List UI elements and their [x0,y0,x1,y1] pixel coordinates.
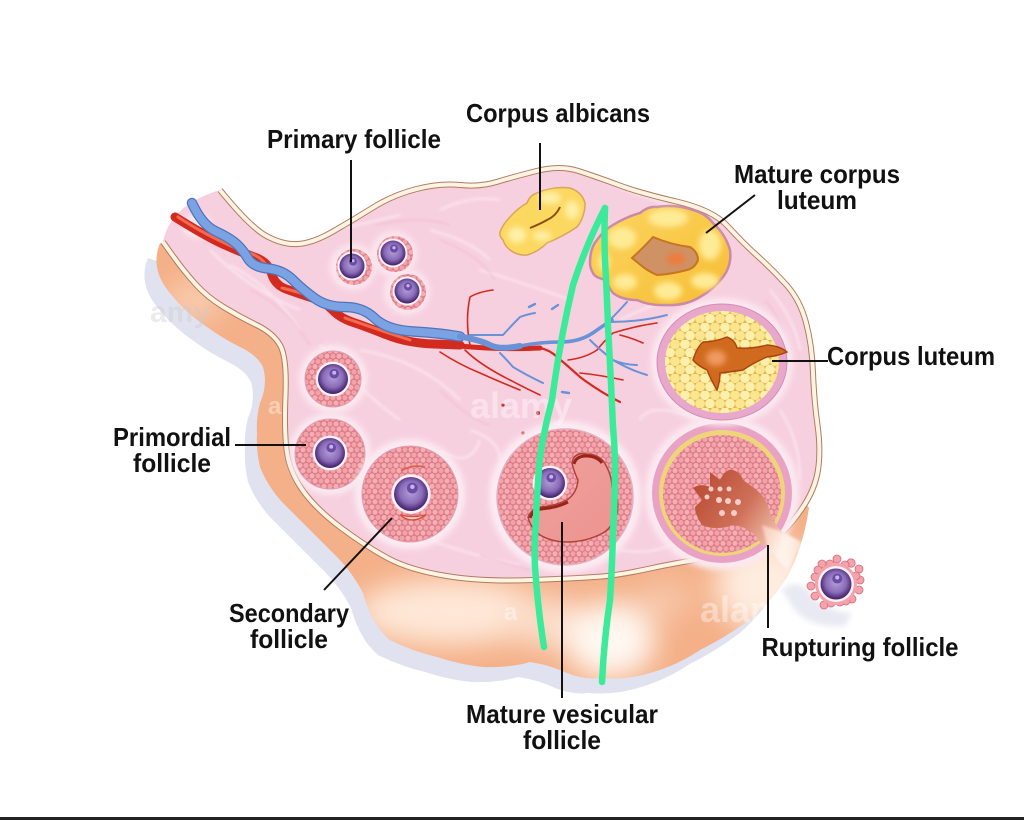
pale fade at the cut end [183,214,211,238]
central clot [632,237,698,275]
label: Mature vesicular follicle: Mature vesicular [466,699,658,729]
label: Rupturing follicle: Rupturing follicle [762,632,958,662]
release stream [762,525,803,570]
watermark: alamy: alamy [470,385,572,426]
illustration: ovary cross-section [140,168,864,693]
corpus luteum [651,298,793,426]
loose cells in cavity [704,486,741,516]
leader lines [235,143,828,698]
dark cavity edges [530,456,602,518]
label: Primordial follicle: follicle [133,448,211,478]
rupturing follicle [645,416,803,570]
connective tissue texture [210,180,800,565]
label: Mature corpus luteum: Mature corpus [734,159,900,189]
albicans crease [530,207,560,228]
luteal lobes [598,209,721,300]
ruptured cavity [693,470,783,547]
mature corpus luteum [590,206,730,305]
watermark: alamy: a [268,393,282,420]
label: Primary follicle: Primary follicle [267,124,441,154]
watermark: alamy [150,296,782,630]
vein (blue) [192,203,667,393]
label: Secondary follicle: Secondary [229,598,349,628]
watermark: alamy: alam [700,589,782,630]
oocyte [533,466,567,500]
label: Corpus luteum: Corpus luteum [827,341,995,371]
label: Mature corpus luteum: luteum [777,185,857,215]
ovary drop shadow [144,258,797,693]
corpus albicans [500,188,585,255]
label: Primordial follicle: Primordial [113,422,231,452]
artery (red) [175,217,657,402]
blood spots [501,403,540,435]
follicular cavity [528,454,618,542]
released ovum [782,555,864,626]
watermark: alamy: amy [150,296,210,329]
green marker annotation [535,208,615,682]
ovary rim outline [163,168,819,580]
mature vesicular follicle [489,421,641,573]
ovary pink body [163,168,819,580]
label: Corpus albicans: Corpus albicans [466,98,650,128]
primordial follicles [289,345,371,495]
label: Secondary follicle: follicle [250,624,328,654]
primary follicles [330,231,430,315]
albicans lobes [508,192,579,243]
watermark: alamy: a [504,599,518,626]
bottom edge line [0,817,1024,820]
secondary follicle [355,439,465,549]
ovary outer wall [156,243,809,678]
label: Mature vesicular follicle: follicle [523,725,601,755]
